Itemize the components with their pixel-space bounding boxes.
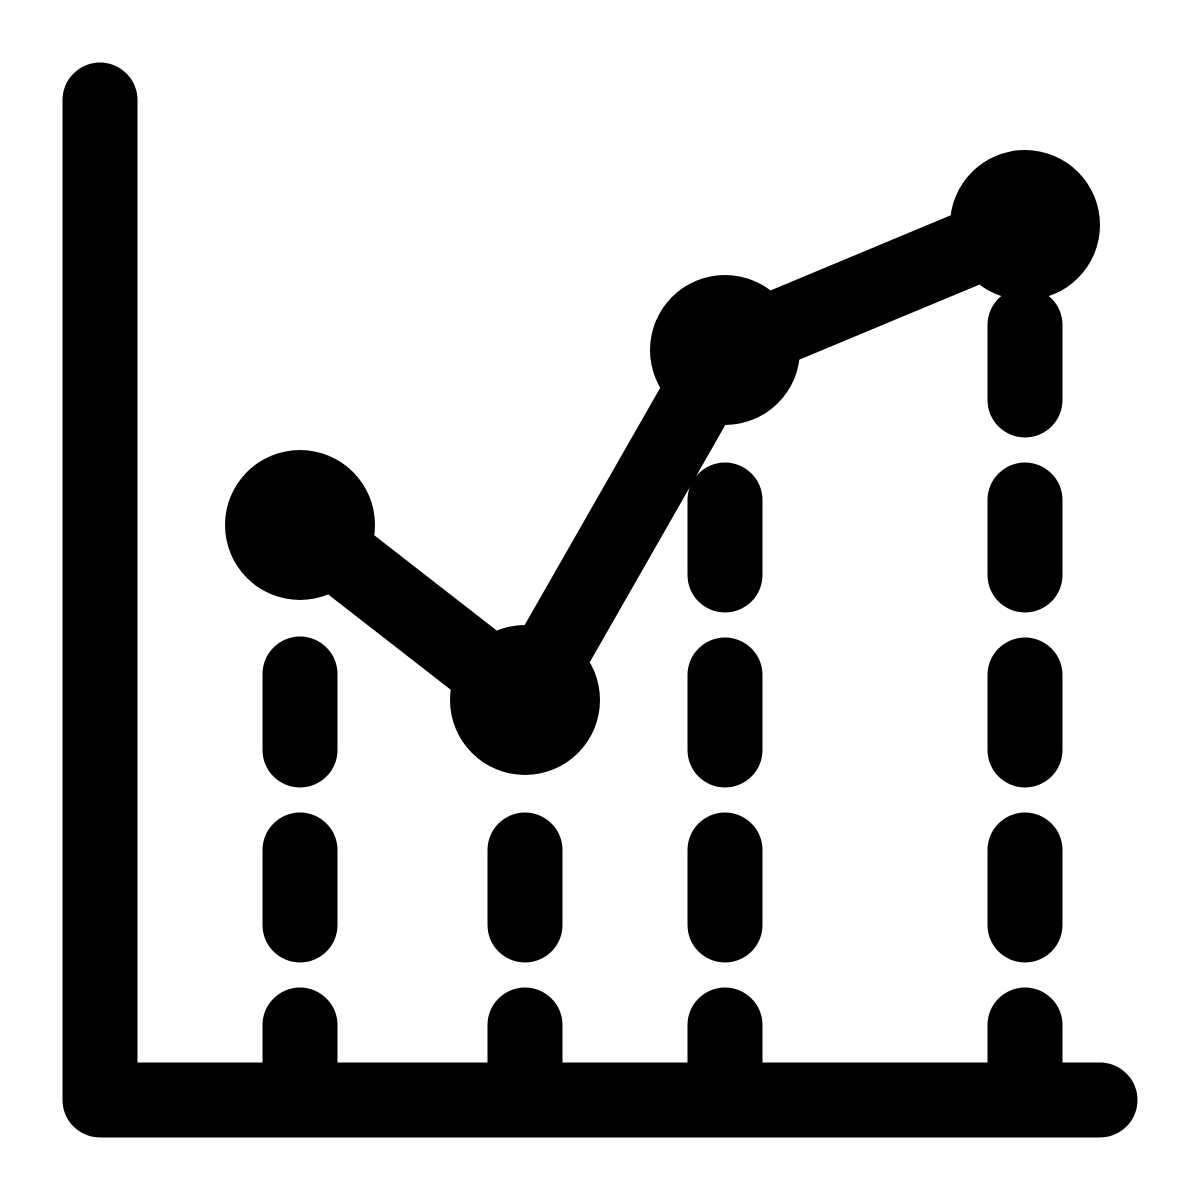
data points	[225, 150, 1100, 775]
axes	[100, 100, 1100, 1100]
dashed drop line 3	[688, 500, 762, 1100]
trend line	[300, 225, 1025, 700]
dashed drop line 1	[262, 674, 338, 1100]
dashed drop line 2	[488, 850, 562, 1100]
dashed drop line 4	[988, 325, 1062, 1100]
